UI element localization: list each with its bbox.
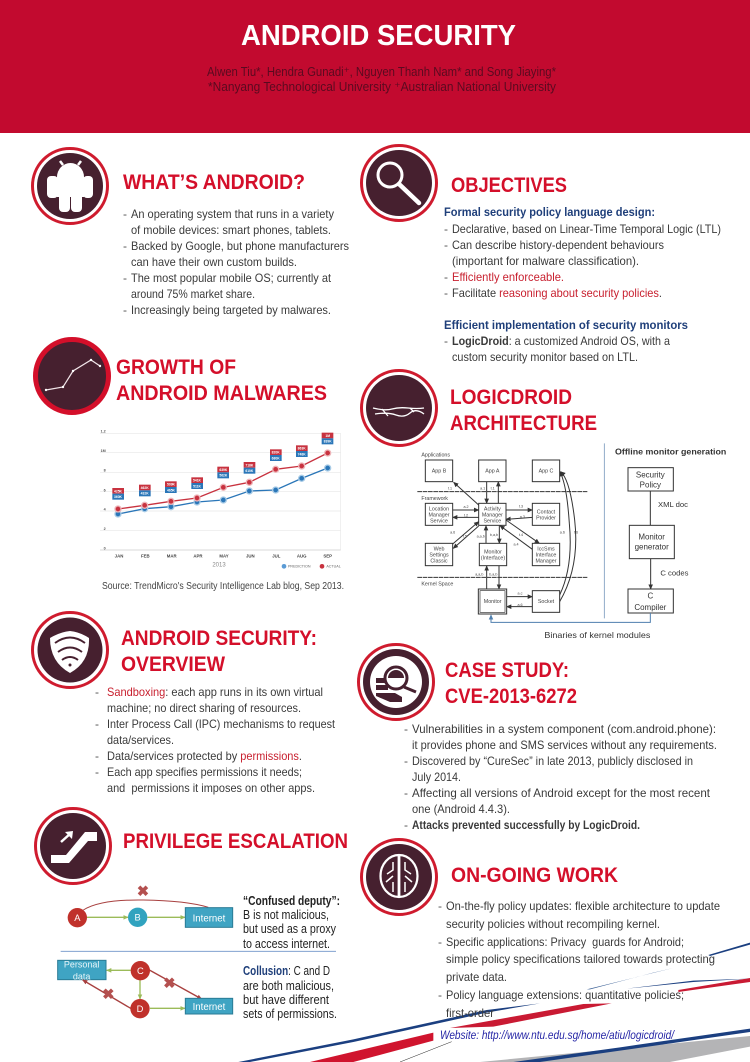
line chart: 610K — [245, 469, 254, 473]
architecture diagram: a.2 — [463, 505, 469, 509]
line chart: 541K — [193, 479, 202, 483]
architecture diagram: a,a,b — [475, 573, 483, 577]
architecture diagram: Manager — [535, 558, 557, 564]
line chart: 8 — [104, 469, 106, 473]
bullet list: language design: - — [444, 222, 448, 236]
bullet list: Policy language extensions: quantitative policies; — [446, 988, 684, 1002]
bullet list: first-order — [446, 1006, 494, 1020]
text: confused deputy: to access internet. — [243, 936, 330, 951]
website link: Website: http://www.ntu.edu.sg/home/atiu/logicdroid/ — [440, 1028, 675, 1042]
architecture diagram: App C — [539, 469, 554, 475]
panel: logicdroid architecture: ARCHITECTURE — [450, 411, 597, 435]
line chart: 360K — [114, 495, 123, 499]
line chart: JAN — [115, 554, 123, 559]
architecture diagram: Manager — [428, 512, 450, 518]
line chart: 1.2 — [101, 430, 106, 434]
panel: what's android — [32, 148, 349, 317]
line chart: 680K — [272, 456, 280, 460]
architecture diagram: Provider — [536, 515, 556, 521]
architecture diagram: Socket — [538, 599, 555, 605]
bullet list: - — [95, 749, 99, 763]
decorative swooshes at bottom — [238, 943, 750, 1062]
bullet list: around 75% market share. — [131, 287, 255, 301]
bullet list — [95, 685, 336, 795]
architecture diagram: Manager — [482, 512, 503, 518]
heading: GROWTH OF — [116, 355, 236, 379]
panel: growth of android malwares — [36, 340, 344, 592]
text: collusion: but have different — [243, 992, 329, 1007]
line chart: PREDICTION — [288, 565, 311, 569]
text: collusion: are both malicious, — [243, 978, 334, 993]
diagram: confused deputy and collusion — [58, 884, 336, 1018]
bullet list: The most popular mobile OS; currently at — [131, 271, 332, 285]
bullet list: machine; no direct sharing of resources. — [107, 701, 301, 715]
bullet list: - — [438, 988, 442, 1002]
bullet list: Affecting all versions of Android except for the most recent — [412, 786, 711, 800]
diagram: confused deputy and collusion: Internet — [193, 913, 226, 924]
line chart: APR — [193, 554, 203, 559]
architecture diagram: a.c — [518, 591, 523, 595]
architecture diagram: a.6 — [560, 530, 565, 534]
bullet list: one (Android 4.4.3). — [412, 802, 510, 816]
architecture diagram: App B — [432, 469, 447, 475]
architecture diagram: Security — [636, 470, 665, 479]
panel: logicdroid architecture — [362, 370, 726, 640]
bullet list: simple policy specifications tailored towards protecting — [446, 952, 715, 966]
bullet list: of mobile devices: smart phones, tablets. — [131, 223, 331, 237]
architecture diagram: Framework — [421, 496, 448, 502]
bullet list: language design: (important for malware classification). — [452, 254, 639, 268]
diagram: confused deputy and collusion: ✖ — [163, 976, 175, 992]
bullet list: language design: Facilitate reasoning about security policies. — [452, 286, 662, 300]
text: collusion: sets of permissions. — [243, 1006, 337, 1021]
heading: CASE STUDY: — [445, 658, 569, 682]
architecture diagram: Applications — [421, 453, 450, 459]
architecture diagram: generator — [635, 543, 669, 552]
line chart: JUN — [246, 554, 255, 559]
bullet list: - — [404, 754, 408, 768]
bullet list: implementation: LogicDroid: a customized Android OS, with a — [452, 334, 670, 348]
architecture diagram: a.6 — [450, 531, 455, 535]
architecture diagram: Interface — [536, 552, 556, 558]
chart source: Source: TrendMicro's Security Intelligence Lab blog, Sep 2013. — [102, 581, 344, 592]
line chart: 6 — [104, 488, 106, 492]
line chart: 432K — [141, 492, 149, 496]
line chart: 639K — [219, 468, 228, 472]
line chart: 511K — [193, 484, 201, 488]
bullet list: security policies without recompiling kernel. — [446, 917, 660, 931]
panel: case study — [358, 644, 717, 832]
architecture diagram: Service — [483, 518, 501, 524]
icon: search over documents — [358, 644, 434, 720]
line chart: 748K — [298, 452, 306, 456]
architecture diagram: App A — [485, 469, 500, 475]
bullet list: July 2014. — [412, 770, 461, 784]
text: confused deputy — [243, 893, 340, 951]
subheading: language design: Formal security policy language design: — [444, 205, 655, 219]
bullet list: - — [123, 303, 127, 317]
line chart: SEP — [323, 554, 332, 559]
bullet list: - — [123, 207, 127, 221]
architecture diagram: Settings — [429, 552, 449, 558]
architecture diagram: Location — [429, 506, 449, 512]
architecture diagram: IccSms — [537, 546, 555, 552]
bullet list: On-the-fly policy updates: flexible architecture to update — [446, 899, 720, 913]
bullet list: can have their own custom builds. — [131, 255, 297, 269]
bullet list — [123, 207, 349, 317]
heading: PRIVILEGE ESCALATION — [123, 829, 348, 853]
panel: growth of android malwares: ANDROID MALWARES — [116, 381, 327, 405]
architecture diagram: Classic — [430, 558, 448, 564]
authors: Alwen Tiu*, Hendra Gunadi⁺, Nguyen Thanh Nam* and Song Jiaying* — [207, 65, 556, 79]
line chart: 465K — [167, 488, 176, 492]
architecture diagram: a,a,b — [477, 534, 485, 538]
architecture diagram: t.3 — [519, 505, 523, 509]
architecture diagram — [417, 443, 726, 640]
bullet list: Each app specifies permissions it needs; — [107, 765, 302, 779]
line chart: 839K — [324, 440, 332, 444]
icon: line chart — [36, 340, 108, 412]
line chart: 462K — [141, 486, 149, 490]
icon: circuit squiggle — [362, 370, 436, 446]
bullet list: and permissions it imposes on other apps. — [107, 781, 315, 795]
diagram: confused deputy and collusion: ✖ — [137, 884, 149, 900]
bullet list: - — [123, 239, 127, 253]
icon: shield — [32, 612, 108, 688]
diagram: confused deputy and collusion: data — [73, 972, 90, 982]
bullet list: language design — [444, 222, 721, 300]
architecture diagram: t.1 — [491, 487, 495, 491]
bullet list: data/services. — [107, 733, 174, 747]
architecture diagram: (Interface) — [481, 555, 505, 561]
panel: android security overview: OVERVIEW — [121, 652, 226, 676]
bullet list: implementation — [444, 334, 670, 364]
architecture diagram: Kernel Space — [421, 582, 453, 588]
heading: ANDROID SECURITY: — [121, 626, 317, 650]
line chart: ACTUAL — [326, 565, 341, 569]
panel: privilege escalation — [36, 808, 348, 1021]
architecture diagram: t.2 — [464, 514, 468, 518]
line chart: 562K — [219, 474, 228, 478]
bullet list: - — [404, 818, 408, 832]
text: collusion — [243, 963, 337, 1021]
line chart: 1M — [325, 434, 330, 438]
line chart: 1M — [101, 449, 106, 453]
bullet list: language design: Declarative, based on Linear-Time Temporal Logic (LTL) — [452, 222, 721, 236]
line chart: 0 — [104, 546, 106, 550]
bullet list: - — [123, 271, 127, 285]
bullet list: Discovered by “CureSec” in late 2013, publicly disclosed in — [412, 754, 693, 768]
line chart: MAR — [167, 554, 177, 559]
diagram: confused deputy and collusion: Personal — [64, 960, 99, 970]
architecture diagram: Binaries of kernel modules — [544, 630, 651, 640]
bullet list: implementation: - — [444, 334, 448, 348]
line chart: JUL — [272, 554, 281, 559]
line chart: 2 — [104, 527, 106, 531]
affiliations: *Nanyang Technological University ⁺Australian National University — [208, 80, 557, 94]
bullet list: - — [95, 717, 99, 731]
architecture diagram: Monitor — [484, 549, 502, 555]
text: collusion: Collusion: C and D — [243, 963, 330, 978]
bullet list: language design: - — [444, 286, 448, 300]
bullet list: Vulnerabilities in a system component (com.android.phone): — [412, 722, 716, 736]
line chart: MAY — [219, 554, 229, 559]
bullet list: language design: - — [444, 238, 448, 252]
bullet list: An operating system that runs in a variety — [131, 207, 334, 221]
diagram: confused deputy and collusion: B — [135, 913, 141, 923]
line chart: FEB — [141, 554, 150, 559]
line chart: AUG — [297, 554, 307, 559]
bullet list: private data. — [446, 970, 507, 984]
line chart: 4 — [104, 508, 107, 512]
bullet list: Data/services protected by permissions. — [107, 749, 302, 763]
bullet list: Sandboxing: each app runs in its own virtual — [107, 685, 323, 699]
architecture diagram: a.4 — [513, 542, 519, 546]
panel: on-going work — [362, 840, 720, 1042]
bullet list: Specific applications: Privacy guards for Android; — [446, 935, 684, 949]
diagram: confused deputy and collusion: C — [137, 966, 144, 976]
subheading: implementation: Efficient implementation of security monitors — [444, 318, 688, 332]
icon: magnifier — [362, 146, 436, 220]
bullet list: Inter Process Call (IPC) mechanisms to request — [107, 717, 336, 731]
architecture diagram: Activity — [484, 506, 501, 512]
architecture diagram: b,a,b — [490, 533, 498, 537]
bullet list: - — [95, 765, 99, 779]
title: ANDROID SECURITY — [241, 20, 516, 52]
architecture diagram: Monitor — [638, 533, 665, 542]
line chart: 718K — [245, 463, 254, 467]
architecture diagram: Policy — [640, 480, 661, 489]
line chart: 2013 — [212, 562, 226, 568]
architecture diagram: a.6 — [517, 603, 523, 607]
architecture diagram: XML doc — [658, 500, 688, 509]
line chart: 425K — [114, 489, 123, 493]
architecture diagram: Offline monitor generation — [615, 447, 726, 457]
heading: ON-GOING WORK — [451, 863, 618, 887]
icon: escalator — [36, 808, 110, 884]
line chart: 820K — [272, 451, 280, 455]
line chart — [100, 430, 341, 569]
architecture diagram: Service — [430, 518, 448, 524]
heading: WHAT’S ANDROID? — [123, 170, 305, 194]
architecture diagram: Compiler — [634, 603, 667, 612]
architecture diagram: C — [647, 592, 653, 601]
architecture diagram: t.1 — [448, 487, 452, 491]
icon: brain — [362, 840, 436, 914]
header banner — [0, 0, 750, 133]
bullet list: language design: - — [444, 270, 448, 284]
architecture diagram: Web — [434, 546, 444, 552]
text: confused deputy: B is not malicious, — [243, 907, 329, 922]
architecture diagram: b,a,b — [489, 573, 497, 577]
architecture diagram: t.4 — [519, 533, 523, 537]
architecture diagram: a.3 — [520, 515, 525, 519]
bullet list: Attacks prevented successfully by LogicDroid. — [412, 818, 640, 832]
bullet list — [438, 899, 720, 1020]
bullet list: Backed by Google, but phone manufacturers — [131, 239, 349, 253]
bullet list: language design: Can describe history-dependent behaviours — [452, 238, 664, 252]
architecture diagram: Contact — [537, 509, 556, 515]
architecture diagram: a.1 — [480, 487, 485, 491]
bullet list: it provides phone and SMS services without any requirements. — [412, 738, 717, 752]
line chart: 863K — [298, 447, 306, 451]
text: confused deputy: but used as a proxy — [243, 921, 336, 936]
panel: android security overview — [32, 612, 336, 795]
diagram: confused deputy and collusion: ✖ — [102, 987, 114, 1003]
architecture diagram: Monitor — [484, 599, 502, 605]
heading: LOGICDROID — [450, 385, 572, 409]
bullet list: implementation: custom security monitor based on LTL. — [452, 350, 638, 364]
bullet list: - — [404, 722, 408, 736]
architecture diagram: t.5 — [463, 535, 467, 539]
bullet list: Increasingly being targeted by malwares. — [131, 303, 331, 317]
panel: case study: CVE-2013-6272 — [445, 684, 577, 708]
icon: android robot — [32, 148, 108, 224]
architecture diagram: t.6 — [574, 530, 578, 534]
bullet list: - — [438, 899, 442, 913]
diagram: confused deputy and collusion: A — [74, 913, 81, 923]
diagram: confused deputy and collusion: D — [137, 1004, 144, 1014]
bullet list: - — [438, 935, 442, 949]
line chart: 509K — [167, 483, 176, 487]
bullet list: language design: Efficiently enforceable. — [452, 270, 564, 284]
bullet list: - — [95, 685, 99, 699]
bullet list: - — [404, 786, 408, 800]
panel: objectives — [362, 146, 721, 364]
text: confused deputy: “Confused deputy”: — [243, 893, 340, 908]
architecture diagram: C codes — [660, 568, 689, 577]
bullet list — [404, 722, 717, 832]
diagram: confused deputy and collusion: Internet — [193, 1002, 226, 1013]
heading: OBJECTIVES — [451, 173, 567, 197]
